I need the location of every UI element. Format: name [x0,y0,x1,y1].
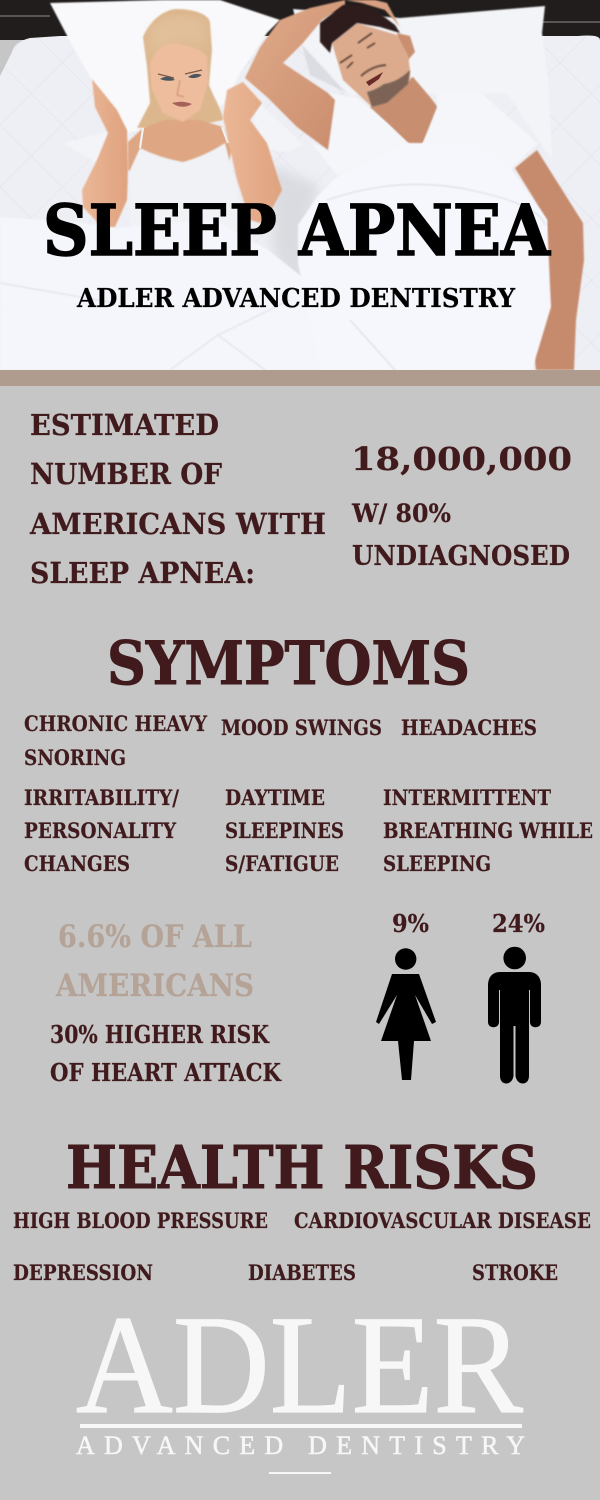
symptoms list: DAYTIME [225,786,325,811]
woman chest [128,120,232,175]
mattress [0,36,600,370]
title: SLEEP APNEA [43,189,552,272]
health risks list: DEPRESSION [13,1261,153,1286]
18,000,000 statistic: 18,000,000 [351,440,572,478]
man raised arm [245,0,345,150]
logo: Adler Advanced Dentistry: ADVANCED DENTISTRY [76,1431,525,1460]
man eyes and brows [340,33,375,68]
symptoms list: SLEEPING [383,852,491,877]
woman percentage: 9% [392,909,429,938]
man beard [367,70,410,107]
heart attack risk [50,1020,282,1087]
estimated americans text: NUMBER OF [30,457,222,491]
headboard [0,0,600,40]
health risks heading: HEALTH RISKS [66,1133,538,1202]
left pillow [50,0,280,133]
symptoms list: PERSONALITY [24,819,177,844]
health risks list: DIABETES [248,1261,356,1286]
woman hair [137,9,223,128]
woman facial features [158,70,202,107]
woman right arm and hand [223,82,282,223]
18,000,000 statistic: W/ 80% [351,499,451,528]
duvet over woman [0,217,322,370]
symptoms list: MOOD SWINGS [221,716,382,741]
man right arm and hand [515,150,584,370]
man face [332,23,410,107]
symptoms list: SLEEPINES [225,819,344,844]
symptoms list: INTERMITTENT [383,786,551,811]
symptoms list: IRRITABILITY/ [24,786,179,811]
estimated americans text [29,408,326,590]
hero photo: couple in bed [0,0,600,370]
symptoms list: HEADACHES [401,716,537,741]
man ear [397,33,415,60]
heart attack risk: OF HEART ATTACK [50,1058,282,1087]
icon: man [488,947,541,1084]
symptoms list [24,712,593,877]
man hair [320,5,400,53]
estimated americans text: AMERICANS WITH [29,507,326,541]
logo: Adler Advanced Dentistry: ADLER [76,1287,523,1443]
symptoms heading: SYMPTOMS [107,629,470,699]
health risks list [13,1209,591,1286]
man shirt [329,94,526,168]
man percentage: 24% [492,909,545,938]
man neck and chest [370,77,440,145]
icon: woman [376,948,436,1080]
18,000,000 statistic: UNDIAGNOSED [352,541,570,572]
18,000,000 statistic [351,440,572,572]
6.6% of all americans: 6.6% OF ALL [58,919,252,955]
subtitle: ADLER ADVANCED DENTISTRY [76,284,515,314]
symptoms list: S/FATIGUE [225,852,339,877]
woman tank top [129,142,238,226]
6.6% of all americans [55,919,254,1004]
health risks list: STROKE [472,1261,558,1286]
health risks list: HIGH BLOOD PRESSURE [13,1209,268,1234]
symptoms list: CHANGES [24,852,130,877]
man moustache and mouth [361,65,386,86]
woman left arm and hand [82,79,128,228]
lower pillow [77,108,297,160]
duvet over man [298,143,551,370]
6.6% of all americans: AMERICANS [55,968,254,1004]
gap shadow between sleepers [270,168,318,275]
symptoms list: SNORING [24,746,126,771]
man hand on head [345,0,400,27]
divider band [0,370,600,386]
estimated americans text: SLEEP APNEA: [30,556,255,590]
symptoms list: CHRONIC HEAVY [24,712,208,737]
woman face [150,43,208,122]
right pillow [293,6,552,160]
heart attack risk: 30% HIGHER RISK [50,1020,270,1049]
estimated americans text: ESTIMATED [30,408,219,442]
